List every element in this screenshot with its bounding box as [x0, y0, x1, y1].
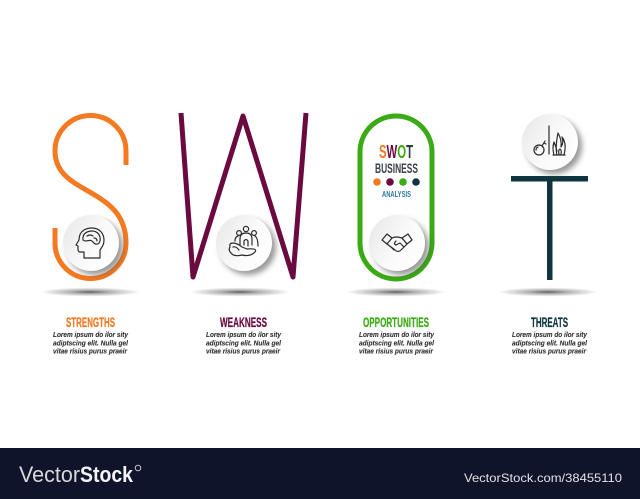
block: weakness: vitae risius purus praeir	[206, 347, 281, 356]
block: strengths: STRENGTHS	[66, 315, 115, 330]
block: strengths: adiptscing elit. Nulla gel	[53, 338, 129, 347]
block: weakness: WEAKNESS	[220, 315, 267, 330]
letter O	[360, 116, 432, 279]
block: strengths	[53, 315, 129, 356]
block: weakness: Lorem ipsum do ilor sity	[206, 330, 282, 339]
disc: opportunities	[369, 215, 429, 275]
center heading: SWOT Business Analysis	[373, 142, 420, 199]
block: threats: adiptscing elit. Nulla gel	[512, 338, 588, 347]
block: strengths: Lorem ipsum do ilor sity	[53, 330, 129, 339]
letter S	[55, 116, 126, 278]
footer logo: Vector	[19, 462, 80, 487]
disc: strengths	[63, 215, 123, 275]
block: threats: THREATS	[531, 315, 568, 330]
footer logo	[19, 462, 141, 487]
word: SWOT: SWOT	[379, 142, 413, 162]
word: ANALYSIS: ANALYSIS	[382, 189, 411, 199]
block: opportunities: vitae risius purus praeir	[359, 347, 434, 356]
four coloured dots	[373, 178, 420, 186]
ground shadows	[40, 288, 598, 296]
footer bar	[0, 448, 640, 499]
icon: bomb and fire	[534, 126, 565, 155]
block: opportunities: OPPORTUNITIES	[363, 315, 429, 330]
footer logo: Stock	[80, 462, 134, 487]
disc: threats	[522, 114, 582, 174]
icon: hand holding people	[229, 226, 258, 256]
word: BUSINESS: BUSINESS	[375, 161, 418, 176]
block: opportunities: adiptscing elit. Nulla gel	[359, 338, 435, 347]
letter T	[511, 176, 588, 280]
letter W	[181, 113, 306, 277]
icon: head with brain	[76, 228, 104, 258]
block: opportunities: Lorem ipsum do ilor sity	[359, 330, 435, 339]
block: threats: Lorem ipsum do ilor sity	[512, 330, 588, 339]
block: weakness	[206, 315, 282, 356]
block: opportunities	[359, 315, 435, 356]
block: strengths: vitae risius purus praeir	[53, 347, 128, 356]
block: weakness: adiptscing elit. Nulla gel	[206, 338, 282, 347]
block: threats	[512, 315, 588, 356]
footer image id: VectorStock.com/38455110	[464, 471, 622, 485]
block: threats: vitae risius purus praeir	[512, 347, 587, 356]
disc: weakness	[216, 215, 276, 275]
icon: handshake	[382, 234, 412, 252]
